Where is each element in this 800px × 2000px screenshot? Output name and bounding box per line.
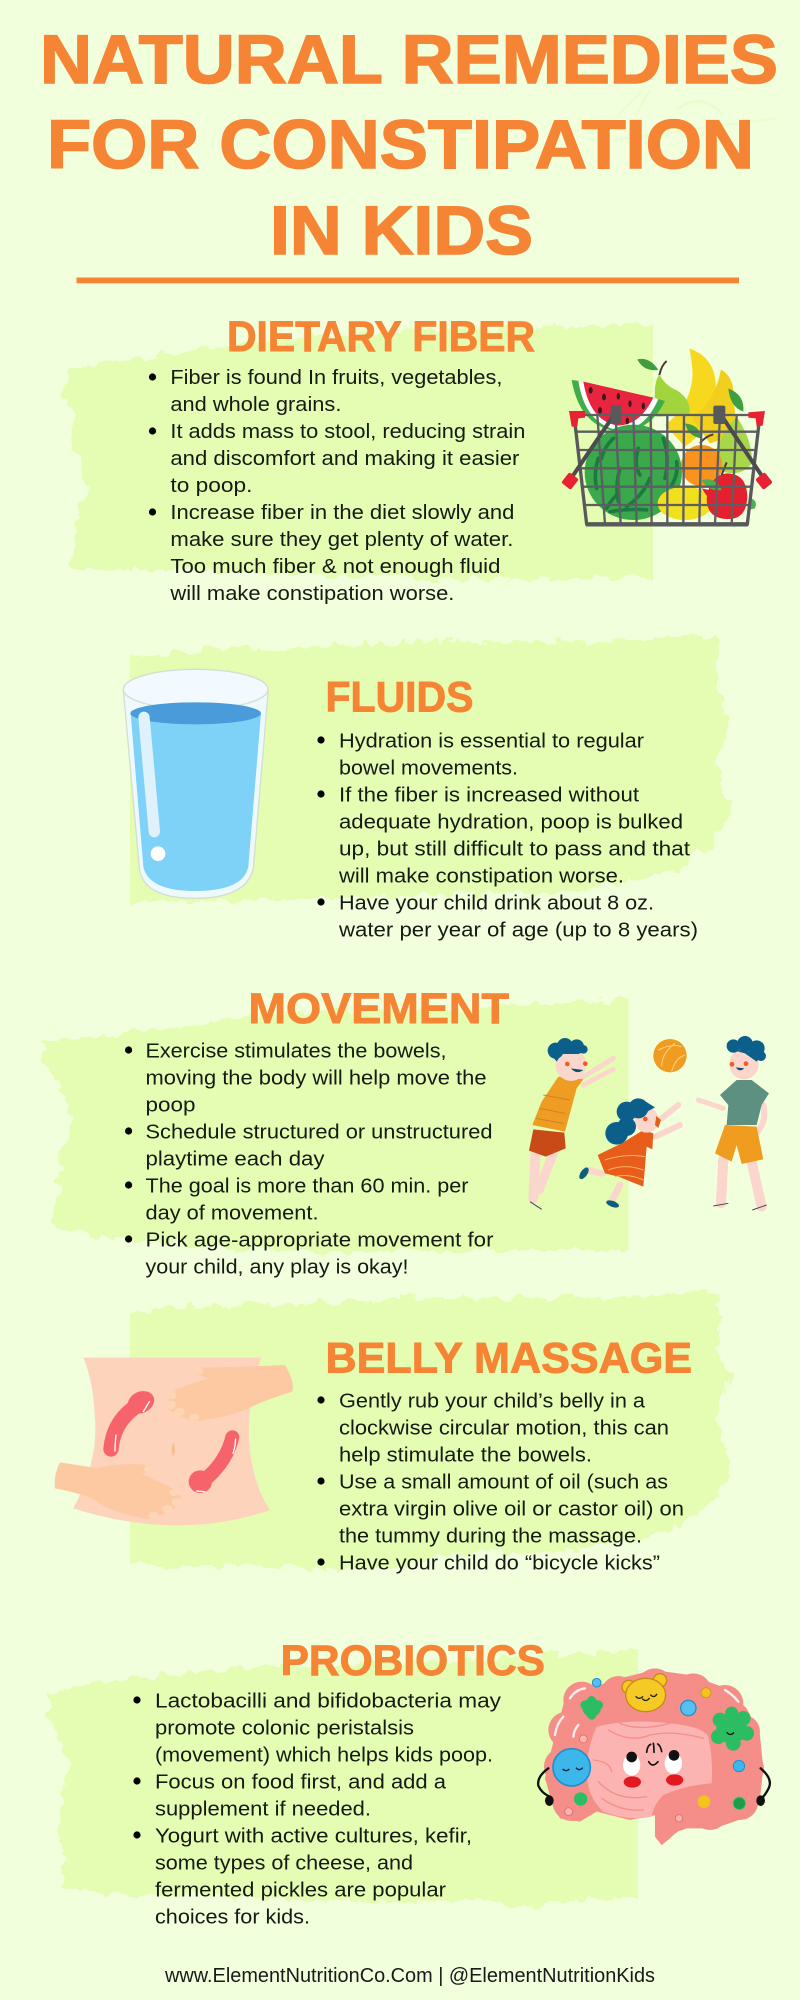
belly massage bullet list [317,1390,684,1575]
probiotics bullet list: Lactobacilli and bifidobacteria may [155,1690,502,1712]
belly massage bullet list: help stimulate the bowels. [339,1444,592,1467]
belly massage bullet list: Have your child do “bicycle kicks” [339,1552,660,1575]
fiber bullet list: will make constipation worse. [169,582,454,605]
ball [653,1039,687,1072]
probiotics bullet list: (movement) which helps kids poop. [155,1744,493,1766]
fluids bullet list: will make constipation worse. [338,864,624,888]
belly massage bullet list: extra virgin olive oil or castor oil) on [339,1498,684,1521]
title: IN KIDS [270,192,533,269]
probiotics brush background [48,1650,655,1906]
title: FOR CONSTIPATION [47,106,754,183]
panel: movement [42,985,769,1278]
belly massage heading: BELLY MASSAGE [326,1334,692,1382]
fluids brush background [110,636,730,902]
movement bullet list: playtime each day [146,1148,325,1170]
fiber brush background [64,325,670,580]
probiotics bullet list: Yogurt with active cultures, kefir, [155,1824,472,1848]
fiber heading: DIETARY FIBER [227,313,535,361]
face [623,1743,683,1788]
fiber bullet list: and discomfort and making it easier [170,447,520,470]
belly massage bullet list: Gently rub your child’s belly in a [339,1390,646,1413]
icon: children playing with ball [529,1036,769,1210]
footer website and handle: www.ElementNutritionCo.Com | @ElementNutritionKids [164,1965,655,1987]
movement bullet list: moving the body will help move the [146,1066,486,1090]
movement bullet list: poop [146,1094,196,1116]
fluids bullet list: If the fiber is increased without [339,784,639,806]
faint watermark sketch [613,90,777,140]
probiotics bullet list: some types of cheese, and [155,1852,413,1874]
fluids bullet list: water per year of age (up to 8 years) [338,918,698,942]
title [40,21,778,269]
bear bacterium [622,1674,667,1712]
fiber bullet list: to poop. [170,474,252,497]
panel: belly massage [55,1292,730,1575]
panel: fluids [110,636,730,942]
fluids bullet list: adequate hydration, poop is bulked [339,810,683,834]
green bacteria [574,1696,754,1806]
fluids bullet list [317,730,698,942]
movement brush background [42,997,645,1252]
probiotics bullet list: choices for kids. [155,1906,310,1928]
probiotics bullet list: fermented pickles are popular [155,1878,446,1902]
icon: glass of water [123,669,268,898]
probiotics heading: PROBIOTICS [281,1637,545,1685]
fluids bullet list: bowel movements. [339,756,518,780]
fiber bullet list: Increase fiber in the diet slowly and [170,501,514,524]
movement bullet list: Exercise stimulates the bowels, [146,1040,446,1062]
right boy [698,1036,769,1210]
panel: dietary fiber [64,313,773,605]
fluids heading: FLUIDS [326,674,474,722]
panel: probiotics [48,1637,770,1928]
fiber bullet list: It adds mass to stool, reducing strain [170,420,525,443]
movement bullet list: your child, any play is okay! [146,1256,408,1278]
fiber bullet list: Too much fiber & not enough fluid [170,555,500,578]
belly massage bullet list: clockwise circular motion, this can [339,1417,669,1440]
fiber bullet list [149,366,525,605]
probiotics bullet list: Focus on food first, and add a [155,1770,447,1794]
fluids bullet list: Have your child drink about 8 oz. [339,892,654,914]
girl [577,1098,680,1209]
icon: fruit basket [561,348,773,524]
movement bullet list: The goal is more than 60 min. per [146,1174,469,1198]
probiotics bullet list [133,1690,502,1928]
icon: hands massaging belly [55,1358,293,1525]
movement bullet list [125,1040,494,1278]
blue bacteria [553,1678,745,1786]
movement heading: MOVEMENT [248,985,509,1033]
probiotics bullet list: supplement if needed. [155,1798,371,1820]
fluids bullet list: Hydration is essential to regular [339,730,644,752]
belly brush background [110,1292,730,1570]
title: NATURAL REMEDIES [40,21,778,98]
probiotics bullet list: promote colonic peristalsis [155,1716,414,1740]
movement bullet list: day of movement. [146,1202,318,1224]
belly massage bullet list: the tummy during the massage. [339,1525,642,1548]
movement bullet list: Schedule structured or unstructured [146,1120,492,1144]
fiber bullet list: Fiber is found In fruits, vegetables, [170,366,502,389]
belly massage bullet list: Use a small amount of oil (such as [339,1471,668,1494]
fiber bullet list: make sure they get plenty of water. [170,528,513,551]
left boy [529,1038,613,1209]
fluids bullet list: up, but still difficult to pass and that [339,838,690,860]
movement bullet list: Pick age-appropriate movement for [146,1228,494,1252]
icon: smiling intestines [538,1668,770,1845]
arms [538,1768,770,1798]
fiber bullet list: and whole grains. [170,393,341,416]
